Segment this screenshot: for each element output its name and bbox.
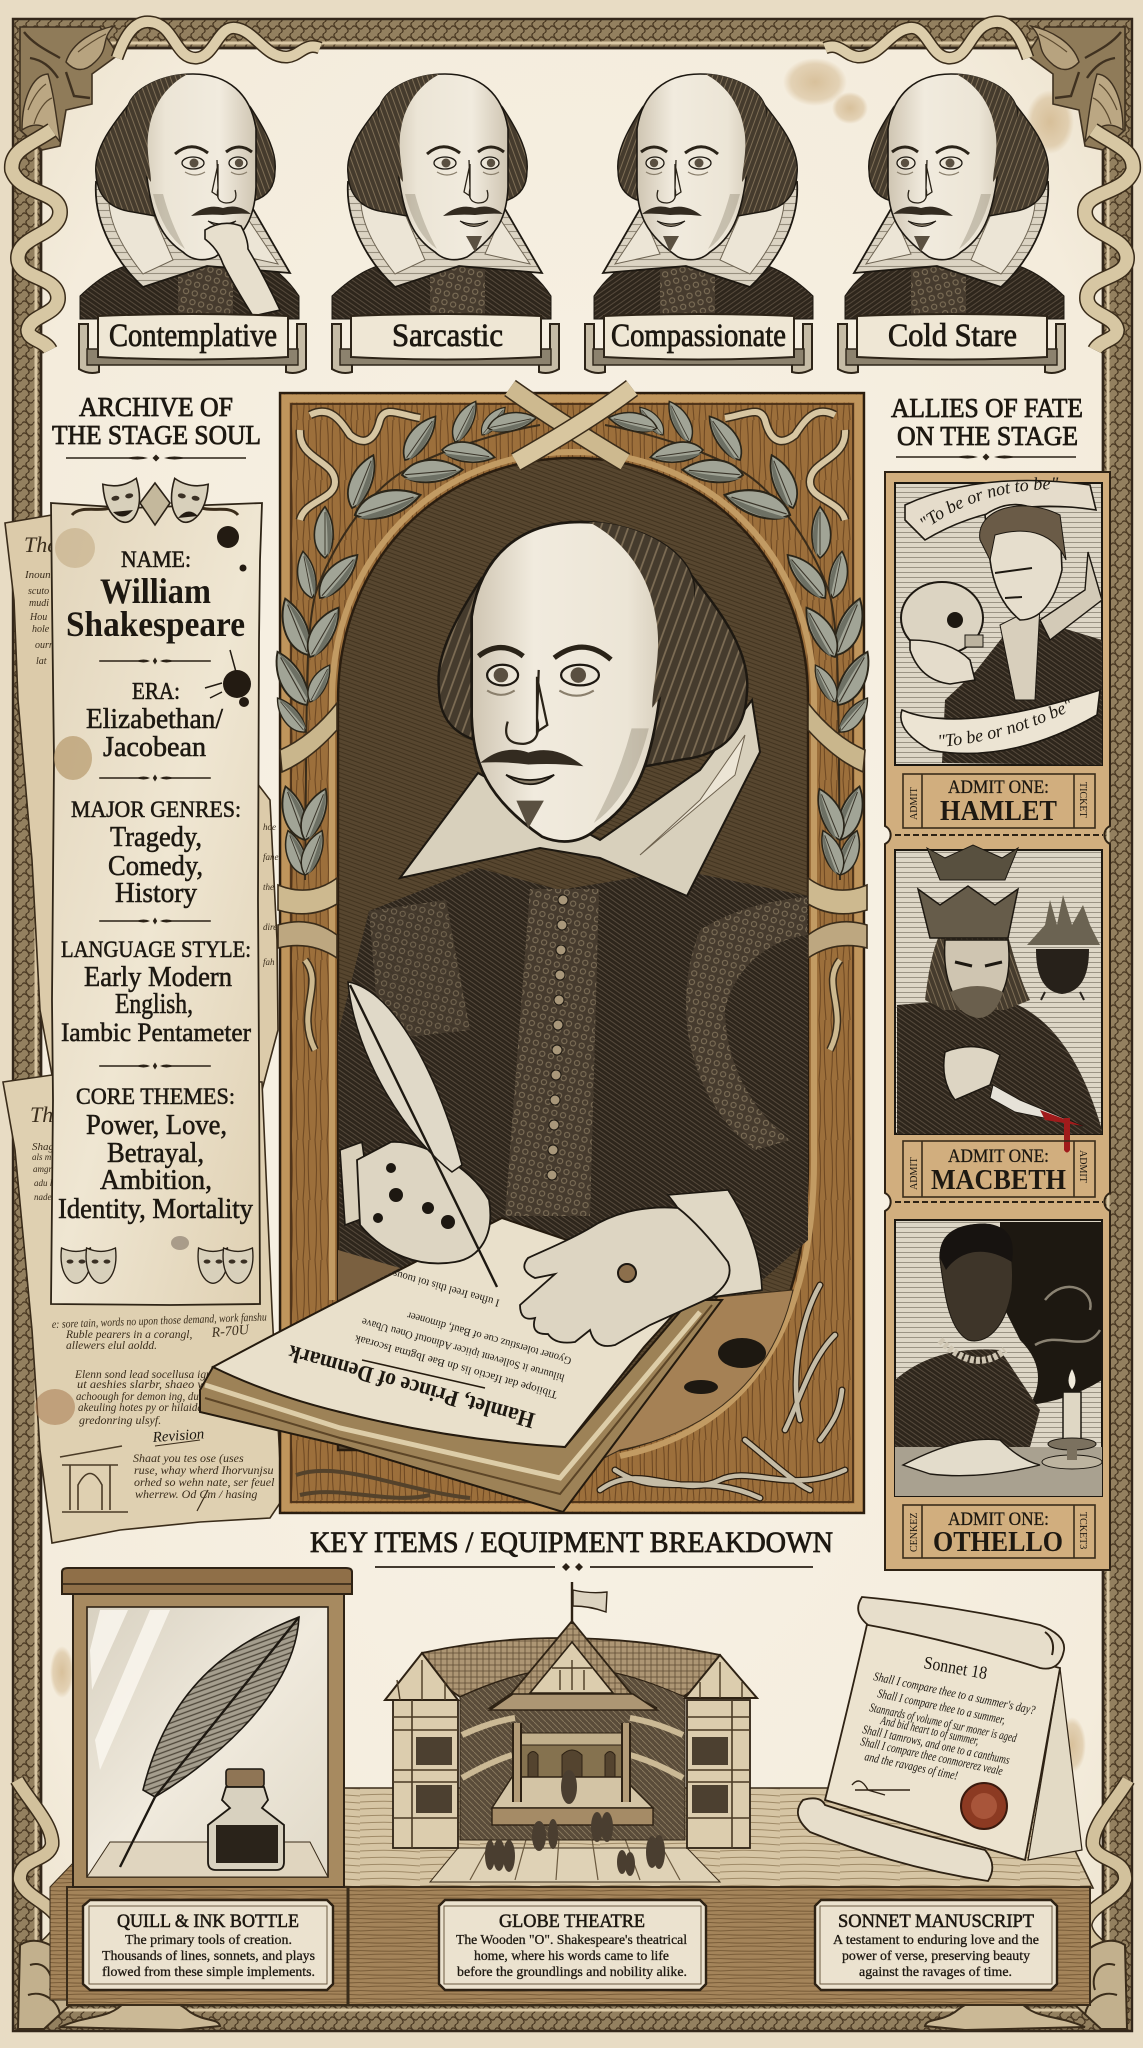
sonnet scroll: And bid heart to of summer, xyxy=(879,1713,980,1748)
back parchment: upper: Inoun xyxy=(24,569,51,581)
back parchment: lower notes: gredonring ulsyf. xyxy=(79,1413,161,1427)
large portrait head xyxy=(438,522,747,841)
laurel branches xyxy=(266,397,540,1050)
field: major genres xyxy=(71,797,241,909)
field: core themes: Ambition, xyxy=(100,1165,212,1196)
pit floor xyxy=(430,1848,720,1882)
ticket label: Hamlet: ADMIT ONE: xyxy=(948,777,1049,798)
desk wood left xyxy=(338,1250,400,1300)
info card: globe theatre: home, where his words came to life xyxy=(474,1949,669,1964)
stage xyxy=(492,1777,653,1808)
back parchment: upper: dire xyxy=(263,922,277,932)
back parchment: lower notes: ut aeshies slarbr, shaeo wu xyxy=(77,1377,212,1391)
field: name xyxy=(66,547,245,644)
sonnet scroll: Sonnet 18 xyxy=(922,1652,989,1683)
field: major genres: MAJOR GENRES: xyxy=(71,797,241,822)
banner: Cold Stare: Cold Stare xyxy=(888,318,1017,354)
ticket label: Macbeth: ADMIT xyxy=(1077,1150,1088,1183)
banner: Contemplative: Contemplative xyxy=(109,318,277,354)
open book with manuscript: I ufhea Ireel this toi tuous xyxy=(392,1267,501,1309)
ticket label: Hamlet: HAMLET xyxy=(940,796,1057,827)
resting hand with ring xyxy=(520,1207,730,1346)
back parchment: upper: the xyxy=(263,882,274,892)
buttoned placket xyxy=(505,889,599,1216)
field: core themes: Power, Love, xyxy=(86,1110,227,1141)
back parchment: upper: fah xyxy=(263,957,275,967)
back parchment: lower notes: The xyxy=(30,1102,63,1127)
sonnet scroll: and the ravages of time! xyxy=(863,1749,959,1783)
central gable xyxy=(490,1621,657,1708)
open book with manuscript: Hamlet, Prince of Denmark xyxy=(285,1340,537,1433)
back parchment: lower notes: Shaat you tes ose (uses xyxy=(133,1451,244,1465)
field: name: NAME: xyxy=(121,547,191,572)
field: major genres: Comedy, xyxy=(108,851,203,882)
back parchment: upper: hole xyxy=(32,624,50,635)
ticket art: Hamlet xyxy=(894,477,1103,766)
ticket label: Macbeth: ADMIT ONE: xyxy=(948,1146,1049,1167)
back parchment: lower notes: nade xyxy=(34,1192,52,1202)
back parchment: lower notes: ruse, whay wherd Ihorvunjsu xyxy=(134,1463,274,1477)
info card: sonnet manuscript: power of verse, preserving beauty xyxy=(842,1949,1030,1964)
back parchment: upper: The xyxy=(24,532,57,557)
sonnet scroll: Shall I compare thee to a summer's day? xyxy=(872,1669,1037,1717)
field: language style xyxy=(61,937,251,1047)
back parchment: lower notes xyxy=(3,1075,282,1543)
theatre masks bottom xyxy=(61,1236,253,1283)
banner: Compassionate: Compassionate xyxy=(611,318,786,354)
wooden display table xyxy=(50,1788,1093,2005)
portrait: cold stare xyxy=(845,74,1064,319)
field: core themes: Identity, Mortality xyxy=(58,1194,253,1225)
back parchment: lower notes: amgr xyxy=(33,1164,52,1174)
back parchment: lower notes: allewers elul aoldd. xyxy=(66,1340,157,1352)
flag xyxy=(572,1582,607,1624)
arched portrait background xyxy=(338,458,808,1450)
back parchment: lower notes: R-70U xyxy=(210,1323,250,1341)
ruff collar xyxy=(400,700,760,896)
ticket label: Othello xyxy=(903,1505,1095,1558)
writing hand xyxy=(357,1142,490,1263)
wooden frame xyxy=(280,393,864,1513)
field: major genres: History xyxy=(115,878,197,909)
table wood and ink spill xyxy=(580,1290,793,1470)
ticket label: Hamlet: TICKET xyxy=(1077,782,1088,818)
info card: sonnet manuscript: SONNET MANUSCRIPT xyxy=(838,1911,1034,1932)
back parchment: lower notes: e: sore tain, words no upon those demand, work fanshu xyxy=(52,1311,267,1331)
crossed ribbons xyxy=(510,388,632,462)
ticket art: Macbeth xyxy=(895,845,1102,1152)
tea stains xyxy=(50,58,1086,1773)
back parchment: lower notes: als me xyxy=(32,1152,55,1162)
field: era: Elizabethan/ xyxy=(86,704,223,735)
info card: globe theatre: before the groundlings and nobility alike. xyxy=(457,1965,687,1980)
interior galleries xyxy=(460,1668,685,1840)
ticket art: Hamlet: "To be or not to be" xyxy=(920,477,1058,525)
ticket label: Othello: TCKET3 xyxy=(1077,1512,1088,1549)
open book with manuscript: Gyoner tolerstiuz cue of Bauf, dimoneer xyxy=(406,1309,573,1367)
ink bottle xyxy=(208,1769,284,1870)
banner: Compassionate xyxy=(585,314,812,373)
heading: key items: KEY ITEMS / EQUIPMENT BREAKDOWN xyxy=(310,1526,833,1559)
portrait: contemplative xyxy=(80,74,299,319)
glass display case with quill and ink xyxy=(62,1568,352,1887)
back parchment: lower notes: achoough for demon ing, dust xyxy=(76,1389,207,1403)
info card: sonnet manuscript: A testament to enduring love and the xyxy=(833,1933,1039,1948)
info card: quill and ink bottle: flowed from these simple implements. xyxy=(102,1965,315,1980)
back parchment: upper: lat xyxy=(36,656,47,667)
banner: Cold Stare xyxy=(838,314,1065,373)
info card: quill and ink bottle xyxy=(83,1900,333,1990)
panel: admit-one tickets xyxy=(884,471,1111,1571)
left sleeve trim xyxy=(369,900,470,1040)
ticket label: Macbeth: MACBETH xyxy=(931,1165,1066,1196)
field: core themes: CORE THEMES: xyxy=(76,1084,235,1109)
ticket label: Macbeth: ADMIT xyxy=(909,1157,920,1190)
back parchment: lower notes: Elenn sond lead socellusa ignaic it xyxy=(74,1367,236,1381)
stains and ink blots xyxy=(54,526,251,780)
sonnet scroll: Shall I tamrows, and one to a canthums xyxy=(861,1722,1011,1767)
field: language style: Early Modern xyxy=(84,962,232,993)
back parchment: upper: hoe xyxy=(263,822,276,832)
banner: Contemplative xyxy=(79,314,306,373)
portrait: compassionate xyxy=(594,74,813,319)
back parchment: upper: Hou xyxy=(29,612,47,623)
figures xyxy=(485,1770,665,1876)
ticket label: Hamlet xyxy=(903,774,1095,828)
sonnet scroll: Shall I compare thee conmorerez veale xyxy=(859,1734,1004,1778)
field: language style: English, xyxy=(115,989,193,1020)
sonnet scroll: Stannards of volume of sur moner is aged xyxy=(868,1700,1019,1745)
info card: globe theatre xyxy=(439,1900,706,1990)
info card: quill and ink bottle: QUILL & INK BOTTLE xyxy=(117,1911,299,1932)
ticket label: Macbeth xyxy=(903,1141,1095,1197)
carved dark vines lower left xyxy=(296,1471,470,1498)
info card: sonnet manuscript xyxy=(815,1900,1057,1990)
doublet xyxy=(338,868,808,1300)
ticket label: Othello: ADMIT ONE: xyxy=(948,1509,1049,1530)
info card: globe theatre: The Wooden "O". Shakespeare's theatrical xyxy=(456,1933,687,1948)
heading: archive of the stage soul xyxy=(52,392,261,462)
sonnet scroll xyxy=(798,1597,1082,1881)
open book with manuscript: Tibiiope dat Ifactio lis dn Bae Ibgtma Iscoraak xyxy=(353,1332,559,1401)
sonnet scroll: Shall I compare thee to a summer, xyxy=(876,1686,1006,1727)
quill xyxy=(120,1617,299,1867)
griffin and vine ornament xyxy=(600,1285,845,1498)
back parchment: lower notes: adu l xyxy=(34,1178,53,1188)
info card: sonnet manuscript: against the ravages of time. xyxy=(859,1965,1012,1980)
back parchment: lower notes: Ruble pearers in a corangl, xyxy=(65,1329,193,1341)
portrait row xyxy=(80,74,1064,319)
heading: archive of the stage soul: ARCHIVE OF xyxy=(79,392,233,422)
portrait: sarcastic xyxy=(332,74,551,319)
info card: quill and ink bottle: The primary tools of creation. xyxy=(125,1933,292,1948)
quill feather xyxy=(348,982,497,1287)
info card: quill and ink bottle: Thousands of lines, sonnets, and plays xyxy=(102,1949,315,1964)
globe theatre model xyxy=(385,1582,757,1882)
back parchment: lower notes: orhed so wehn nate, ser feuel xyxy=(134,1475,275,1489)
ticket label: Othello: CENKEZ xyxy=(909,1513,920,1552)
right sleeve trim xyxy=(686,897,807,1150)
back parchment: upper: scuto xyxy=(28,586,49,597)
ticket art: Hamlet: "To be or not to be" xyxy=(940,700,1070,746)
curved roof xyxy=(422,1638,720,1697)
field: core themes: Betrayal, xyxy=(107,1138,204,1169)
back parchment: upper: fane xyxy=(263,852,279,862)
field: core themes xyxy=(58,1084,253,1225)
cuffs xyxy=(340,1142,762,1297)
banner: Sarcastic: Sarcastic xyxy=(392,318,503,354)
field: major genres: Tragedy, xyxy=(110,822,202,853)
field: language style: Iambic Pentameter xyxy=(61,1018,251,1047)
right tower xyxy=(685,1655,757,1848)
field: era: Jacobean xyxy=(103,732,206,763)
back wall xyxy=(520,1745,623,1779)
ticket label: Othello: OTHELLO xyxy=(933,1527,1063,1558)
main parchment: biography card xyxy=(51,478,262,1305)
ticket art: Othello xyxy=(895,1220,1102,1496)
back parchment: upper xyxy=(5,515,279,1090)
panel: central portrait frame xyxy=(200,388,879,1513)
field: name: William xyxy=(100,571,211,611)
back parchment: upper: mudi xyxy=(29,598,49,609)
open book with manuscript xyxy=(200,1218,722,1512)
ticket label: Hamlet: ADMIT xyxy=(909,787,920,820)
theatre masks top xyxy=(72,478,238,525)
field: era: ERA: xyxy=(132,679,180,705)
heading: allies of fate: ALLIES OF FATE xyxy=(891,393,1083,423)
field: language style: LANGUAGE STYLE: xyxy=(61,937,251,962)
back parchment: upper: ourr xyxy=(35,640,53,651)
banner: Sarcastic xyxy=(332,314,559,373)
left tower xyxy=(385,1653,458,1848)
back parchment: lower notes: Revision xyxy=(151,1426,205,1446)
info card: globe theatre: GLOBE THEATRE xyxy=(499,1911,645,1932)
open book with manuscript: hiluurue it Sollevent ipiicer Adinotuf Oneu Ubave xyxy=(360,1315,566,1384)
heading: archive of the stage soul: THE STAGE SOUL xyxy=(52,420,261,450)
field: name: Shakespeare xyxy=(66,604,245,644)
back parchment: lower notes: wherrew. Od Cm / hasing xyxy=(135,1487,257,1501)
back parchment: lower notes: Shag xyxy=(32,1141,54,1153)
heading: allies of fate xyxy=(891,393,1083,460)
heading: allies of fate: ON THE STAGE xyxy=(897,421,1078,451)
ink spots on hand xyxy=(373,1163,455,1229)
field: era xyxy=(86,679,223,763)
back parchment: lower notes: akeuling hotes py or hilaidd xyxy=(78,1400,204,1414)
